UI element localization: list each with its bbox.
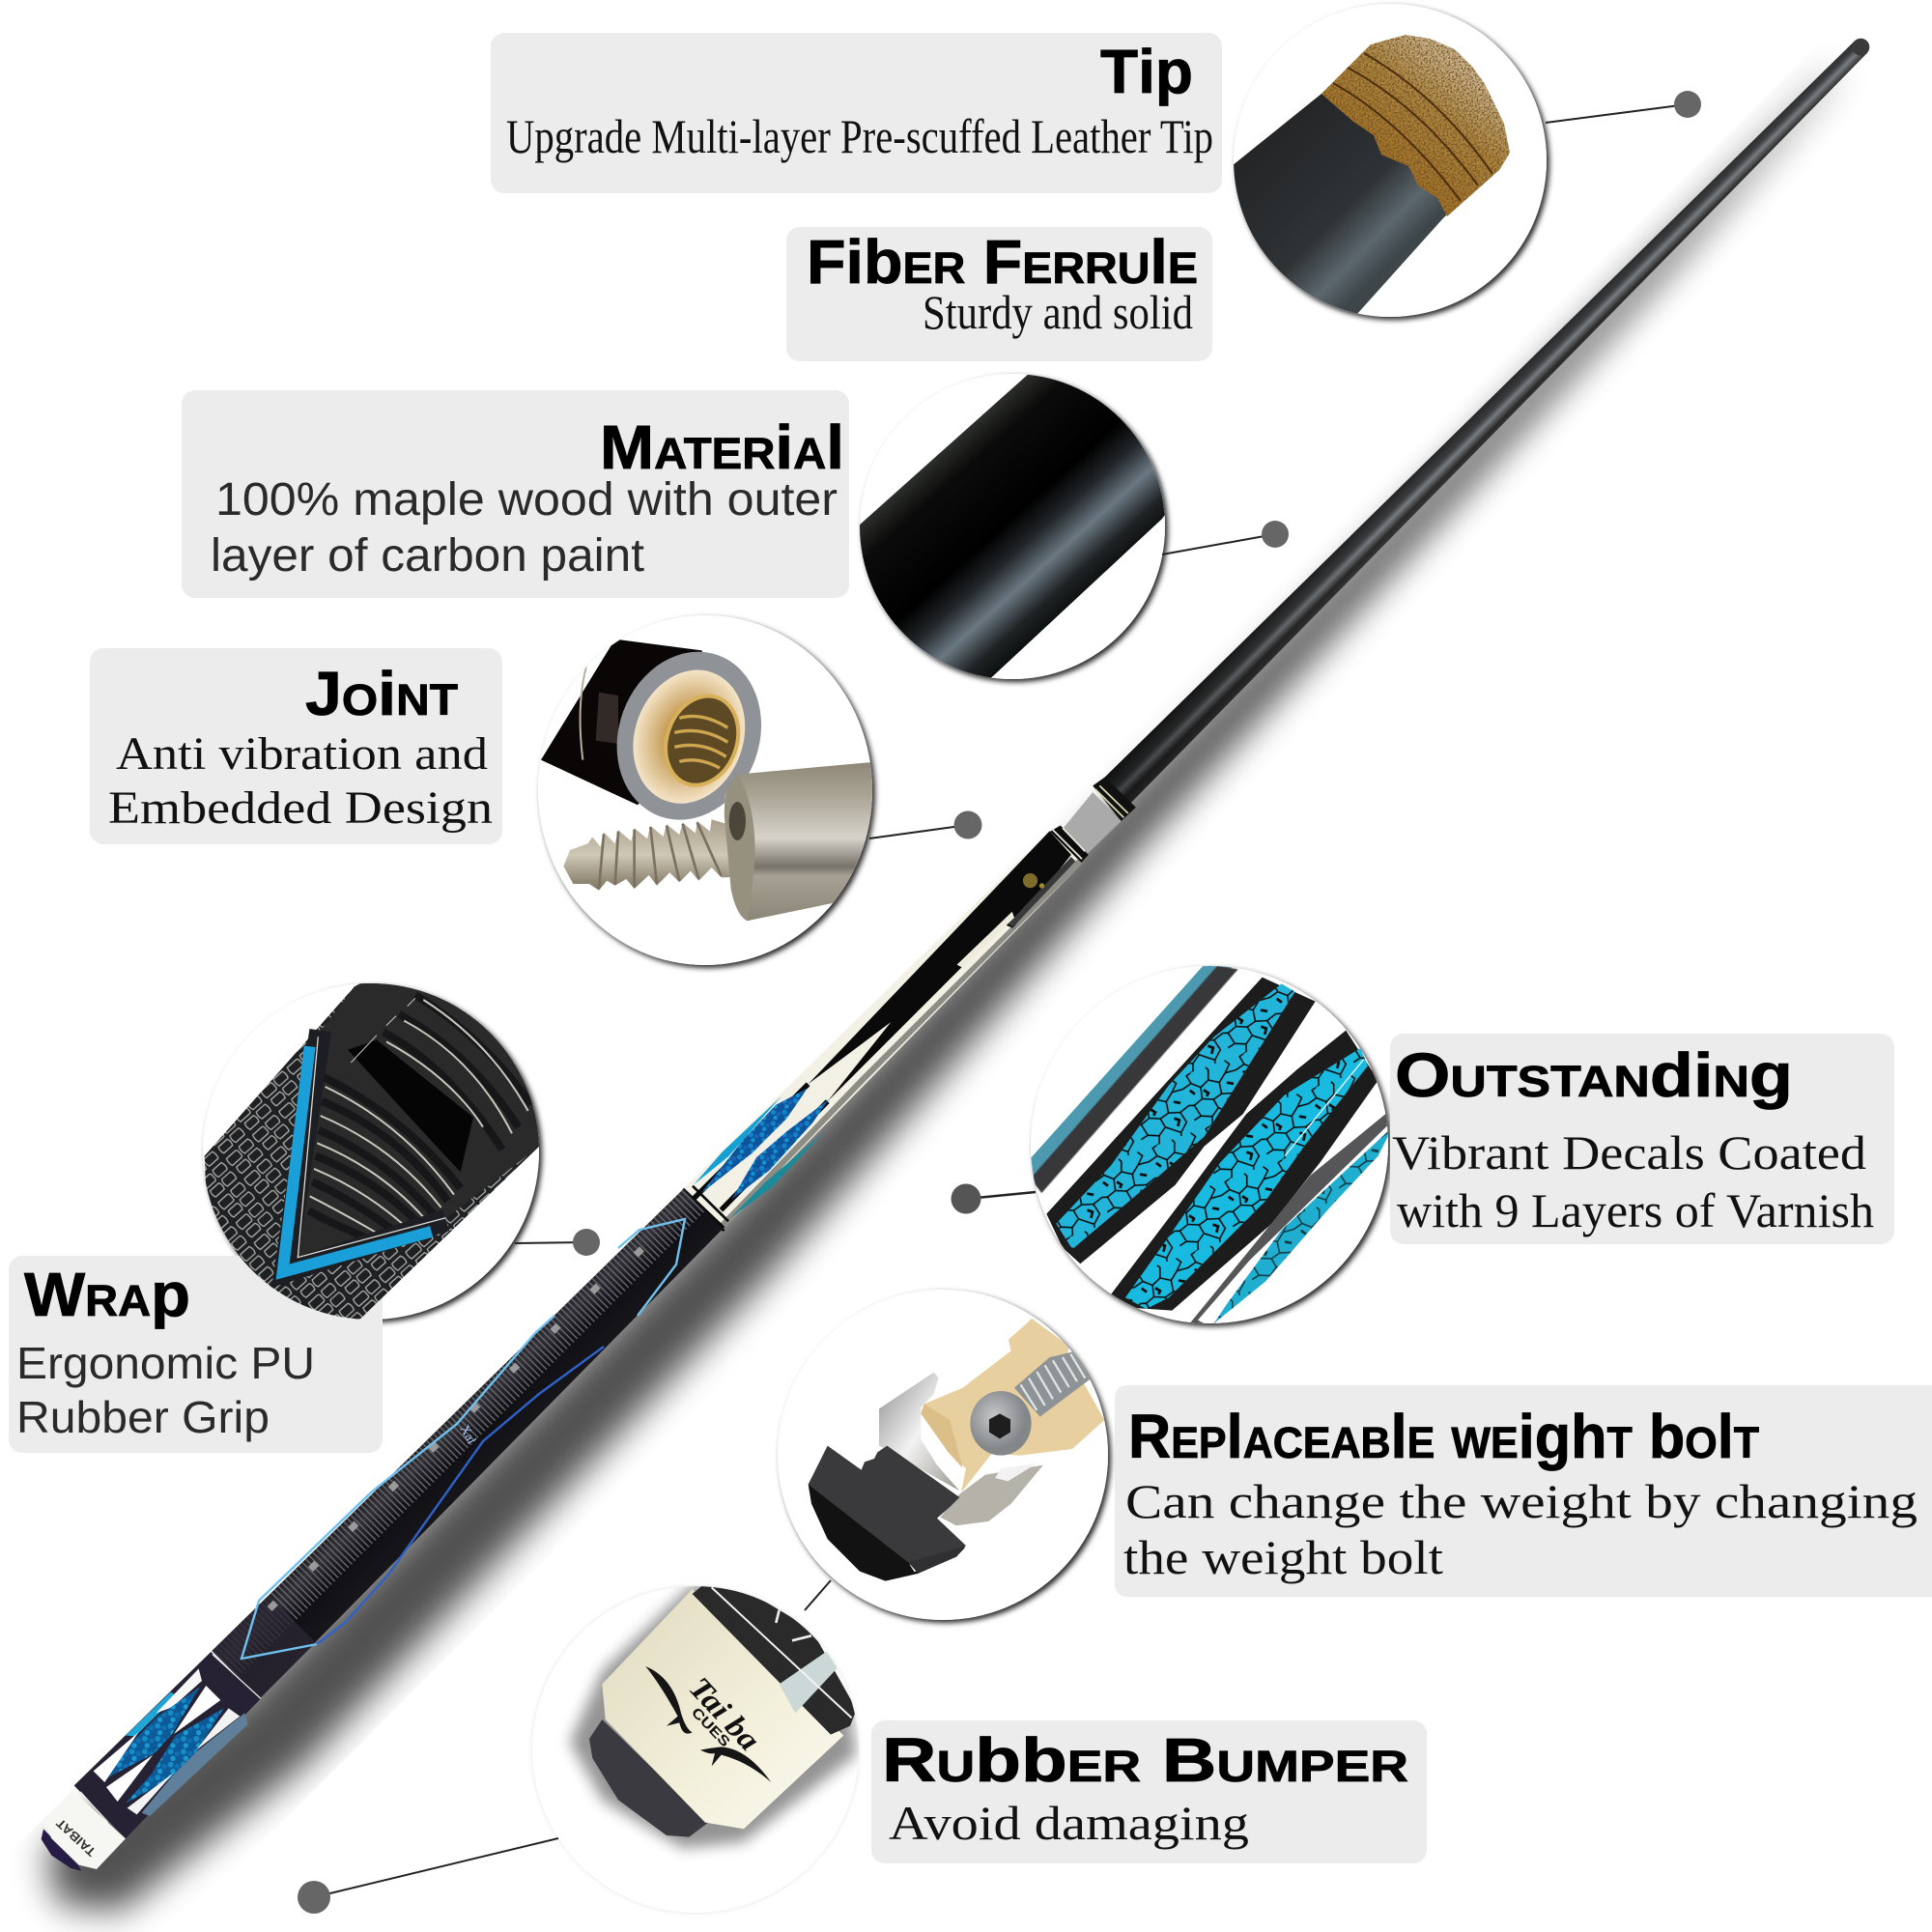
connector: weight bolt: [805, 1580, 831, 1610]
panel: Joint background: [90, 648, 502, 844]
wrap logo text: Xal: [456, 1423, 478, 1447]
icon: carbon shaft close-up: [860, 375, 1165, 678]
text: Wrap description: [16, 1338, 315, 1442]
connector: decals: [951, 1184, 1036, 1213]
text: Joint description: [108, 728, 493, 834]
connector: rubber bumper: [298, 1838, 558, 1914]
bolt thread: [1014, 1350, 1092, 1417]
icon: rubber bumper close-up: CUES: [688, 1705, 733, 1750]
heading: Rubber Bumper: Ru bb er Bumper: [882, 1725, 1408, 1795]
feather logo: [645, 1666, 771, 1782]
brand text: Tai ba: [683, 1670, 767, 1757]
connector: wrap: [515, 1229, 600, 1256]
forearm with blue inlay: [683, 831, 1082, 1231]
text: Material description: 100% maple wood with outer: [215, 474, 838, 526]
panel: Replaceable weight bolt background: [1115, 1385, 1932, 1597]
panel: Material background: [182, 390, 849, 598]
heading: Wrap: Wrap: [24, 1260, 190, 1329]
icon: weight bolt close-up: [809, 1319, 1104, 1581]
icon: wrap close-up: [204, 983, 539, 1320]
text: Material description: [211, 474, 838, 582]
grooves: [308, 995, 531, 1238]
wrap blue lines: [242, 1219, 685, 1659]
heading: Outstanding: Outstan ding: [1395, 1040, 1793, 1110]
text: Replaceable weight bolt description: Can change the weight by changing: [1125, 1474, 1918, 1528]
text: Fiber Ferrule description: Sturdy and solid: [923, 285, 1193, 339]
leather layers: [1321, 35, 1510, 216]
panel: Outstanding background: [1390, 1034, 1894, 1244]
text: Replaceable weight bolt description: [1123, 1474, 1918, 1584]
white discs behind callouts: [203, 4, 1547, 1913]
text: Wrap description: Ergonomic PU: [16, 1338, 315, 1388]
text: Outstanding description: with 9 Layers of Varnish: [1397, 1183, 1874, 1237]
connector: ferrule: [1162, 521, 1289, 554]
threaded pin: [563, 819, 747, 891]
grip position marks: [268, 1240, 644, 1617]
V inlay: [285, 1031, 446, 1272]
text: Outstanding description: Vibrant Decals Coated: [1392, 1125, 1866, 1179]
panel: Fiber Ferrule background: [786, 227, 1212, 361]
text: Material description: layer of carbon paint: [211, 530, 644, 582]
butt cap brand text: TAIBAT: [53, 1816, 99, 1860]
joint collar: [1049, 777, 1136, 865]
text: Replaceable weight bolt description: the weight bolt: [1123, 1530, 1443, 1584]
butt sleeve and bumper: [42, 1652, 261, 1871]
text: Rubber Bumper description: Avoid damaging: [889, 1796, 1249, 1850]
connector: joint: [869, 811, 981, 838]
panel: Wrap background: [9, 1256, 383, 1453]
text: Tip description: Upgrade Multi-layer Pre-scuffed Leather Tip: [506, 109, 1213, 163]
icon: leather tip close-up: [1217, 35, 1510, 324]
text: Joint description: Anti vibration and: [116, 728, 488, 780]
icon: vibrant decal close-up: [1024, 964, 1393, 1323]
barrel: [724, 761, 879, 921]
heading: Material: Material: [600, 412, 844, 482]
heading: Fiber Ferrule: Fiber Ferrule: [807, 227, 1198, 297]
heading: Tip: Tip: [1100, 37, 1193, 106]
panel: Rubber Bumper background: [871, 1720, 1427, 1863]
cue shaft: [1100, 28, 1880, 808]
icon: rubber bumper close-up: [570, 1581, 857, 1848]
panel: Tip background: [491, 33, 1222, 193]
heading: Replaceable weight bolt: Replaceable weight bolt: [1128, 1402, 1759, 1471]
wrap grip: [212, 1184, 726, 1698]
text: Joint description: Embedded Design: [108, 782, 493, 834]
heading: Joint: Joint: [305, 659, 458, 728]
icon: joint pin and insert close-up: [541, 631, 879, 921]
text: Outstanding description: [1392, 1125, 1874, 1237]
text: Wrap description: Rubber Grip: [16, 1392, 270, 1442]
connector: tip: [1546, 91, 1701, 123]
